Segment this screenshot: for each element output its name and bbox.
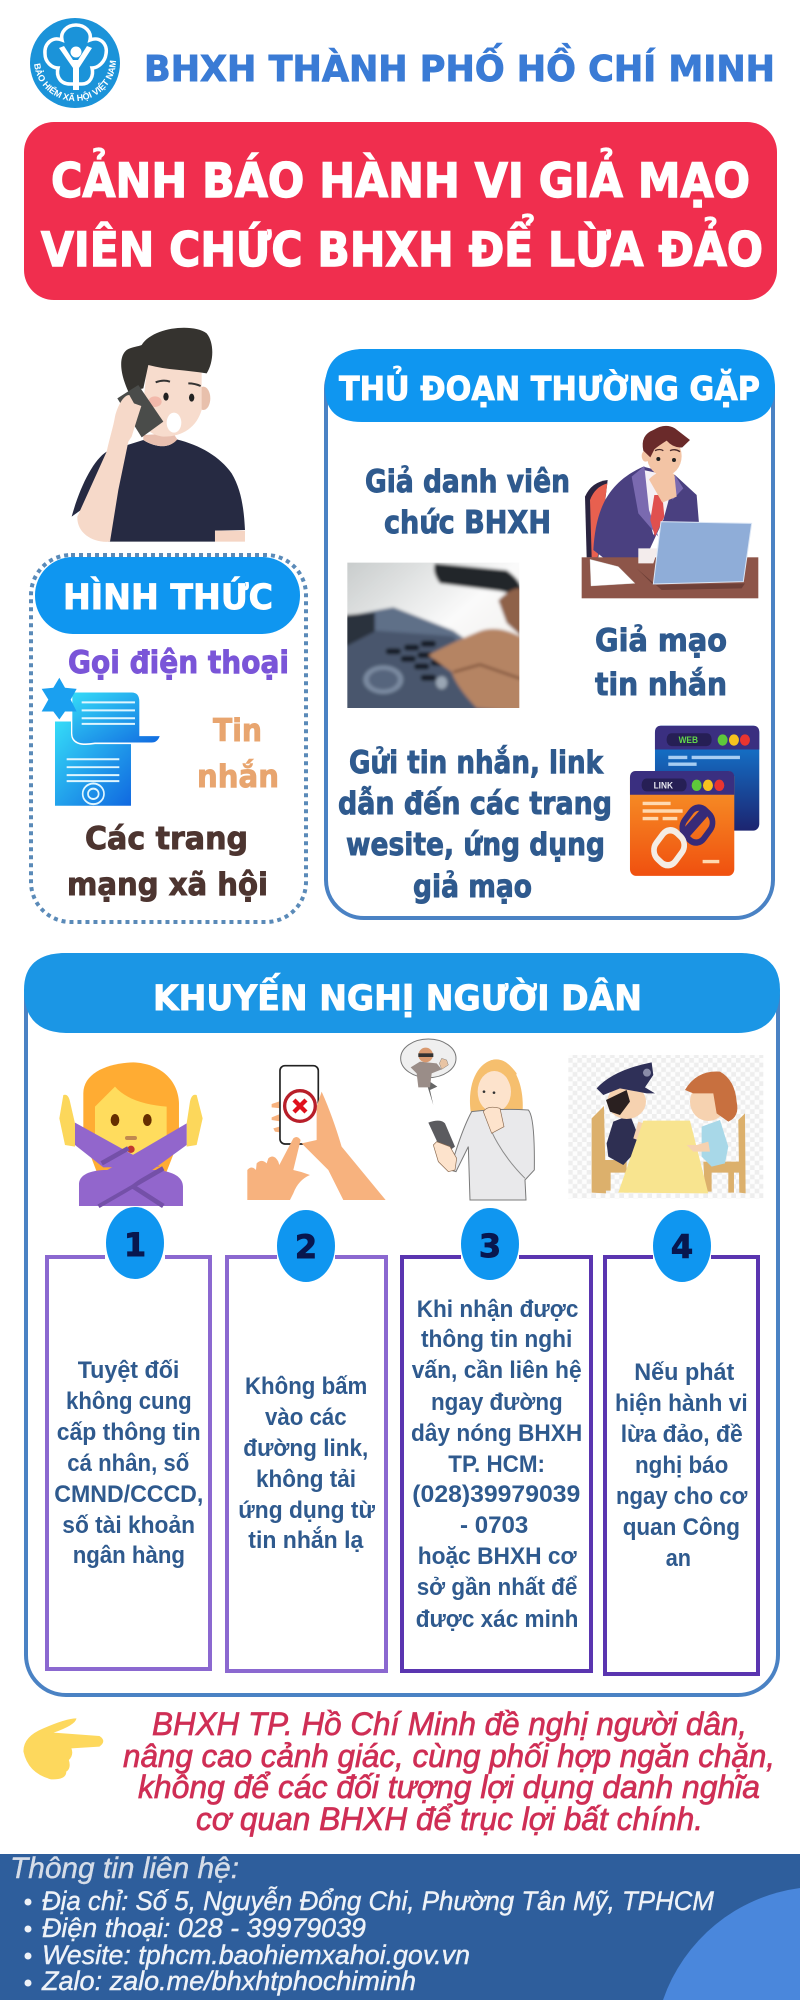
step 1: card: ngân hàng: [73, 1542, 185, 1569]
step 1: number: 1: [124, 1226, 146, 1264]
step 3: number badge: [461, 1208, 519, 1280]
heading: hình thức: [35, 557, 300, 634]
callout: closing message: cơ quan BHXH để trục lợi bất chính.: [196, 1801, 703, 1837]
text: gửi tin nhắn, link: Gửi tin nhắn, link: [349, 745, 604, 781]
logo: BHXH Việt Nam: BẢO HIỂM XÃ HỘI VIỆT NAM: [34, 60, 116, 102]
step 3: card: thông tin nghi: [421, 1326, 572, 1353]
text: các trang mạng xã hội: Các trang: [85, 821, 248, 857]
icon: man at laptop: [582, 426, 758, 598]
step 2: card: [227, 1257, 386, 1671]
icon: worried woman with scammer bubble: [401, 1039, 534, 1200]
text: tin nhắn: [197, 713, 279, 795]
step 4: card: Nếu phát: [634, 1359, 734, 1386]
step 4: card: nghị báo: [635, 1452, 728, 1479]
step 1: card: không cung: [66, 1388, 192, 1415]
step 1: card: cấp thông tin: [57, 1419, 201, 1446]
text: gửi tin nhắn, link: wesite, ứng dụng: [346, 827, 605, 863]
step 4: card: quan Công: [623, 1514, 740, 1541]
text: giả mạo tin nhắn: tin nhắn: [595, 667, 727, 703]
contact list: Wesite: tphcm.baohiemxahoi.gov.vn: [42, 1940, 470, 1970]
text: các trang mạng xã hội: [67, 821, 268, 903]
heading: hình thức: HÌNH THỨC: [63, 576, 273, 618]
step 3: card: [402, 1257, 591, 1671]
icon: hand tapping phone with red x: [247, 1066, 386, 1200]
step 1: card: [47, 1257, 210, 1669]
step 3: card: ngay đường: [431, 1389, 563, 1416]
step 4: card: ngay cho cơ: [616, 1483, 748, 1510]
step 2: card: vào các: [265, 1404, 347, 1431]
step 4: number badge: [653, 1210, 711, 1282]
callout: closing message: [123, 1706, 775, 1837]
icon: man on the phone: [72, 328, 245, 542]
step 4: card: [605, 1257, 758, 1674]
contact list: [24, 1885, 714, 1996]
text: gửi tin nhắn, link: [338, 745, 612, 905]
text: gọi điện thoại: Gọi điện thoại: [68, 645, 289, 681]
step 3: card: - 0703: [460, 1512, 528, 1539]
heading: contact: Thông tin liên hệ:: [10, 1852, 239, 1885]
step 2: number badge: [277, 1210, 335, 1282]
icon: web and link windows: WEB: [679, 735, 699, 745]
panel: thủ đoạn thường gặp: [325, 349, 775, 918]
step 2: card: đường link,: [243, 1435, 368, 1462]
step 4: card: lừa đảo, đề: [621, 1421, 743, 1448]
icon: person crossing arms: [59, 1062, 203, 1206]
icon: web and link windows: LINK: [654, 780, 674, 790]
logo: BHXH Việt Nam: [30, 18, 120, 108]
title banner: [24, 122, 777, 300]
footer: contact information: [0, 1852, 800, 2000]
heading: BHXH Thành phố Hồ Chí Minh: BHXH THÀNH PHỐ HỒ CHÍ MINH: [144, 43, 775, 90]
step 4: number: 4: [671, 1228, 693, 1266]
text: gửi tin nhắn, link: giả mạo: [413, 869, 532, 905]
step 2: card: ứng dụng từ: [238, 1497, 376, 1524]
contact list: Địa chỉ: Số 5, Nguyễn Đổng Chi, Phường Tân Mỹ, TPHCM: [42, 1885, 714, 1916]
title banner: CẢNH BÁO HÀNH VI GIẢ MẠO: [51, 149, 750, 209]
heading: khuyến nghị người dân: [24, 953, 780, 1033]
text: giả danh viên chức BHXH: chức BHXH: [384, 505, 551, 541]
callout: closing message: không để các đối tượng lợi dụng danh nghĩa: [138, 1769, 760, 1805]
step 4: card: hiện hành vi: [615, 1390, 748, 1417]
step 3: card: vấn, cần liên hệ: [412, 1357, 582, 1384]
step 3: card: dây nóng BHXH: [411, 1420, 582, 1447]
text: giả mạo tin nhắn: [595, 623, 727, 703]
step 3: card: được xác minh: [416, 1606, 578, 1633]
icon: document: [42, 678, 161, 806]
text: giả danh viên chức BHXH: Giả danh viên: [365, 464, 570, 500]
step 4: card: an: [666, 1545, 691, 1572]
icon: police officer talking to a woman: [568, 1055, 763, 1198]
step 1: card: số tài khoản: [62, 1512, 195, 1539]
step 2: card: tin nhắn lạ: [248, 1526, 364, 1554]
step 1: card: CMND/CCCD,: [54, 1481, 203, 1508]
panel: hình thức: [31, 555, 306, 922]
icon: pointing hand: [23, 1718, 103, 1779]
step 1: card: cá nhân, số: [67, 1450, 189, 1477]
step 3: card: TP. HCM:: [448, 1451, 545, 1478]
contact list: Zalo: zalo.me/bhxhtphochiminh: [41, 1966, 416, 1996]
callout: closing message: BHXH TP. Hồ Chí Minh đề nghị người dân,: [152, 1706, 747, 1742]
step 2: card: không tải: [256, 1466, 356, 1493]
step 1: card: Tuyệt đối: [78, 1357, 179, 1384]
step 3: number: 3: [479, 1227, 501, 1265]
heading: thủ đoạn thường gặp: [325, 349, 775, 422]
step 2: card: Không bấm: [245, 1373, 367, 1400]
heading: thủ đoạn thường gặp: THỦ ĐOẠN THƯỜNG GẶP: [339, 365, 760, 408]
step 1: number badge: [106, 1207, 164, 1279]
text: giả danh viên chức BHXH: [365, 464, 570, 541]
step 2: number: 2: [295, 1228, 317, 1266]
icon: web and link windows: [630, 726, 759, 876]
step 3: card: hoặc BHXH cơ: [418, 1543, 578, 1570]
callout: closing message: nâng cao cảnh giác, cùng phối hợp ngăn chặn,: [123, 1738, 775, 1774]
heading: khuyến nghị người dân: KHUYẾN NGHỊ NGƯỜI DÂN: [153, 972, 642, 1019]
text: tin nhắn: Tin: [213, 713, 262, 749]
image: dialing a desk phone: [347, 562, 520, 708]
contact list: Điện thoại: 028 - 39979039: [42, 1913, 366, 1943]
text: tin nhắn: nhắn: [197, 759, 279, 795]
step 3: card: Khi nhận được: [417, 1296, 578, 1323]
step 3: card: (028)39979039: [412, 1481, 580, 1508]
step 3: card: sở gần nhất để: [417, 1574, 577, 1601]
text: giả mạo tin nhắn: Giả mạo: [595, 623, 727, 659]
text: gửi tin nhắn, link: dẫn đến các trang: [338, 786, 612, 822]
panel: khuyến nghị người dân: [24, 953, 780, 1695]
text: các trang mạng xã hội: mạng xã hội: [67, 867, 268, 903]
